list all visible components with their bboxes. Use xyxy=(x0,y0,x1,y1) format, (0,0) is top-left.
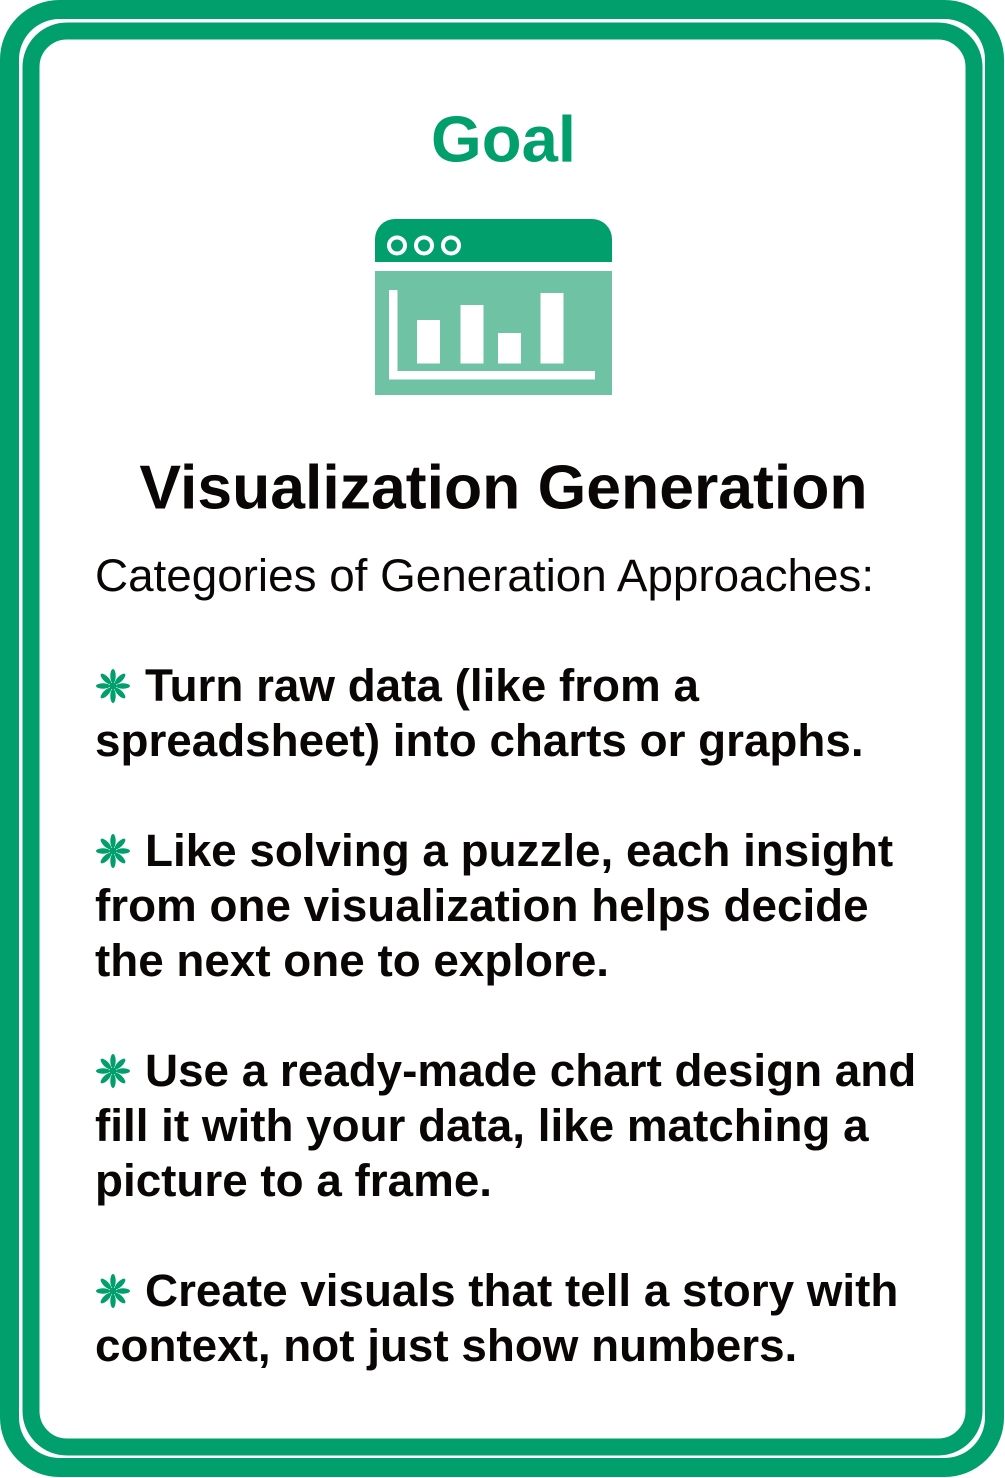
heading: Visualization Generation: Visualization Generation xyxy=(139,452,868,522)
icon: browser window with bar chart xyxy=(375,219,612,395)
bullet 1: spreadsheet) into charts or graphs. xyxy=(95,715,864,766)
bullet 3: fill it with your data, like matching a xyxy=(95,1100,869,1151)
bullet 2: from one visualization helps decide xyxy=(95,880,869,931)
bullet 4 xyxy=(95,1265,898,1371)
bullet 3 xyxy=(95,1045,916,1206)
bullet 2: Like solving a puzzle, each insight xyxy=(145,825,893,876)
subheading: categories: Categories of Generation Approaches: xyxy=(95,550,874,601)
bullet 4: Create visuals that tell a story with xyxy=(145,1265,898,1316)
bullet 2 xyxy=(95,825,893,986)
bullet 4: context, not just show numbers. xyxy=(95,1320,797,1371)
bullet 3: picture to a frame. xyxy=(95,1155,492,1206)
bullet 3: Use a ready-made chart design and xyxy=(145,1045,916,1096)
bullet 1: Turn raw data (like from a xyxy=(145,660,699,711)
bullet 1 xyxy=(95,660,864,766)
heading: Goal: Goal xyxy=(431,102,576,176)
bullet 2: the next one to explore. xyxy=(95,935,609,986)
